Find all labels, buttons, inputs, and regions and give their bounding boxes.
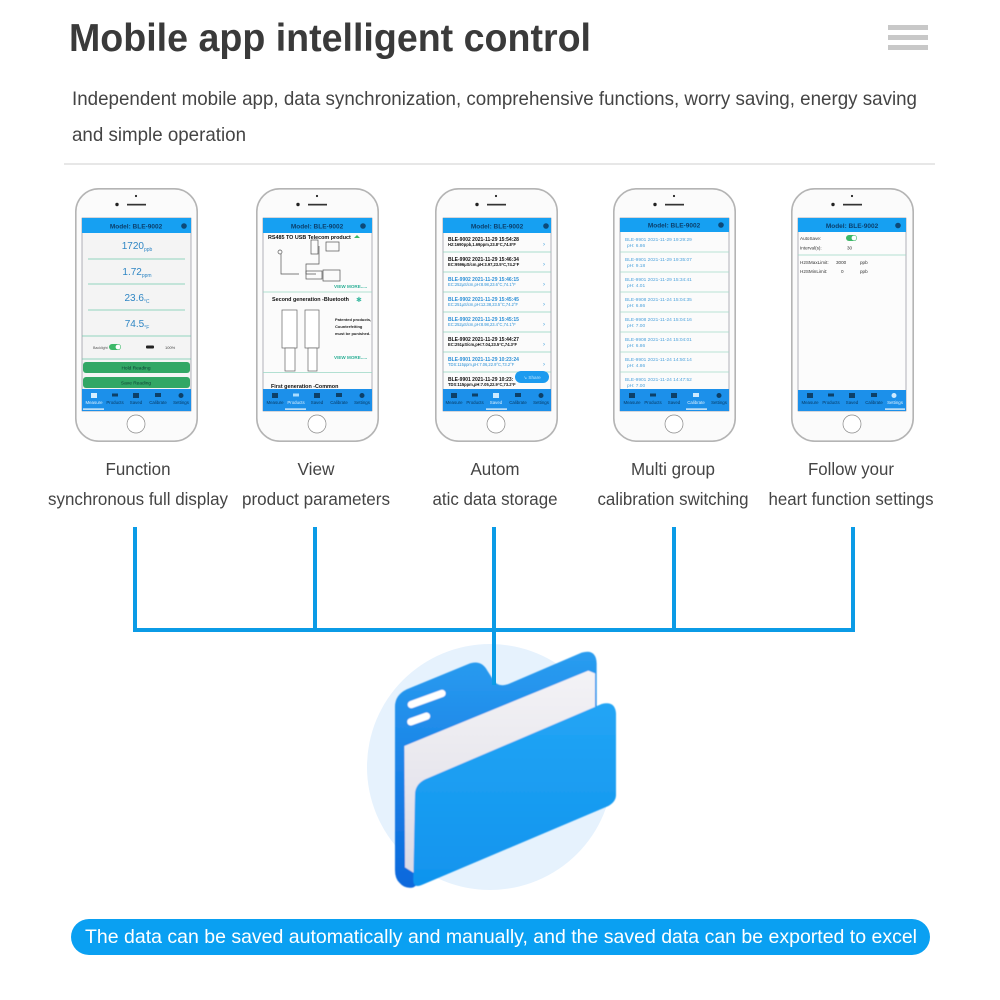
phone: calibration screen: BLE-9901 2021-11-24 14:50:14: [625, 357, 692, 363]
folder back panel: [395, 652, 597, 888]
phone: product parameters screen: VIEW MORE.....: [334, 355, 367, 360]
phone: saved data screen: Saved: [490, 400, 503, 405]
phone: calibration screen: Products: [644, 400, 662, 405]
phone: saved data screen: Measure: [445, 400, 463, 405]
caption: function display: [48, 459, 228, 509]
phone: settings screen: ppb: [860, 269, 868, 274]
phone: live measurement screen: Settings: [173, 400, 190, 405]
caption: calibration switching: [598, 459, 748, 509]
phone: settings screen: Measure: [801, 400, 819, 405]
phone: calibration screen: pH: 9.18: [627, 263, 645, 269]
phone: product parameters screen: Calibrate: [330, 400, 348, 405]
phone: saved data screen: BLE-9902 2021-11-29 15:45:45: [448, 297, 519, 303]
caption: data storage: Autom: [470, 459, 520, 479]
phone: calibration screen: Saved: [668, 400, 681, 405]
caption: calibration switching: Multi group: [631, 459, 715, 479]
phone: calibration screen: Measure: [623, 400, 641, 405]
caption: settings: [768, 459, 934, 509]
phone: calibration screen: BLE-9901 2021-11-24 14:47:52: [625, 377, 692, 383]
phone: calibration screen: Calibrate: [687, 400, 705, 405]
phone: live measurement screen: 74.5: [125, 319, 144, 330]
connector lines: [133, 527, 855, 685]
phone: saved data screen: Model: BLE-9002: [471, 224, 524, 230]
phone: live measurement screen: Hold Reading: [121, 366, 151, 372]
phone: settings screen: 30: [847, 246, 853, 250]
phone: calibration screen: Settings: [711, 400, 728, 405]
phone: live measurement screen: [76, 189, 197, 441]
phone: product parameters screen: [257, 189, 378, 441]
phone: live measurement screen: ppm: [142, 273, 152, 279]
phone: settings screen: ppb: [860, 260, 868, 265]
phone: calibration screen: [614, 189, 735, 441]
caption: settings: Follow your: [808, 459, 894, 479]
phone: product parameters screen: Settings: [354, 400, 371, 405]
phone: saved data screen: ›: [543, 262, 545, 268]
phone: settings screen: Model: BLE-9002: [826, 223, 879, 230]
intro text: and simple operation: [72, 124, 246, 146]
caption: function display: synchronous full display: [48, 489, 228, 509]
phone: product parameters screen: ✱: [356, 296, 362, 304]
phone: saved data screen: EC:9596μS/cm,pH:3.97,23.5°C,74.2°F: [448, 262, 520, 267]
phone: calibration screen: pH: 4.86: [627, 363, 645, 369]
phone: product parameters screen: Second generation -Bluetooth: [272, 297, 349, 303]
callout: export note: The data can be saved automatically and manually, and the saved data can be exported to excel: [85, 926, 917, 948]
phone: saved data screen: ›: [543, 282, 545, 288]
phone: product parameters screen: RS485 TO USB Telecom product: [268, 235, 351, 241]
phone: saved data screen: EC:252μS/cm,pH:8.98,23.6°C,74.1°F: [448, 282, 516, 287]
phone: settings screen: Calibrate: [865, 400, 883, 405]
phone: product parameters screen: Products: [287, 400, 305, 405]
phone: calibration screen: BLE-9901 2021-11-29 19:35:07: [625, 257, 692, 263]
caption: product parameters: View: [298, 459, 335, 479]
phone: calibration screen: pH: 6.86: [627, 343, 645, 349]
phone: settings screen: H2SMinLimit:: [800, 269, 827, 274]
phone: saved data screen: ›: [543, 242, 545, 248]
phone: product parameters screen: Saved: [311, 400, 324, 405]
background circle: [367, 644, 613, 890]
phone: saved data screen: ›: [543, 342, 545, 348]
phone: saved data screen: Calibrate: [509, 400, 527, 405]
phone: live measurement screen: °C: [144, 299, 150, 305]
intro text: Independent mobile app, data synchronization, comprehensive functions, worry saving, energy saving: [72, 88, 917, 110]
phone: calibration screen: Model: BLE-9002: [648, 222, 701, 230]
phone: live measurement screen: Calibrate: [149, 400, 167, 405]
phone: calibration screen: pH: 6.86: [627, 243, 645, 249]
phone: saved data screen: H2:1690ppb,1.69ppm,23.8°C,74.8°F: [448, 242, 516, 247]
folder front panel: [413, 703, 616, 886]
caption: function display: Function: [106, 459, 170, 479]
phone: saved data screen: BLE-9901 2021-11-29 10:23:24: [448, 357, 519, 363]
phone: calibration screen: BLE-9908 2021-11-24 15:04:01: [625, 337, 692, 343]
phone: product parameters screen: First generation -Common: [271, 384, 338, 390]
phone: settings screen: 3000: [836, 260, 847, 265]
phone: live measurement screen: ppb: [144, 247, 153, 253]
caption: calibration switching: calibration switching: [598, 489, 748, 509]
phone: live measurement screen: 1720: [122, 241, 144, 252]
phone: live measurement screen: Save Reading: [121, 380, 151, 386]
paper stack: [404, 671, 595, 873]
phone: calibration screen: BLE-9908 2021-11-24 15:04:35: [625, 297, 692, 303]
icon: folder: [395, 652, 616, 888]
phone: saved data screen: TDS:115ppm,pH:7.06,22.9°C,73.2°F: [448, 362, 515, 367]
phone: saved data screen: [436, 189, 557, 441]
caption: data storage: atic data storage: [432, 489, 558, 509]
phone: live measurement screen: Products: [106, 400, 124, 405]
phone: calibration screen: BLE-9908 2021-11-24 15:04:16: [625, 317, 692, 323]
phone: product parameters screen: Measure: [266, 400, 284, 405]
phone: saved data screen: EC:251μS/cm,pH:12.38,23.5°C,74.2°F: [448, 302, 519, 307]
phone: calibration screen: BLE-9901 2021-11-29 15:34:41: [625, 277, 692, 283]
phone: product parameters screen: Counterfeiting: [335, 324, 363, 329]
phone: calibration screen: BLE-9901 2021-11-29 19:29:29: [625, 237, 692, 243]
phone: saved data screen: EC:251μS/cm,pH:7.04,23.5°C,74.3°F: [448, 342, 518, 347]
phone: saved data screen: Products: [466, 400, 484, 405]
phone: settings screen: Interval(s):: [800, 246, 822, 250]
phone: product parameters screen: VIEW MORE.....: [334, 284, 367, 289]
phone: saved data screen: BLE-9002 2021-11-29 15:54:28: [448, 237, 519, 243]
phone: live measurement screen: 23.6: [124, 293, 144, 304]
phone: saved data screen: ›: [543, 302, 545, 308]
phone: settings screen: Products: [822, 400, 840, 405]
phone: live measurement screen: Model: BLE-9002: [110, 224, 163, 230]
phone: calibration screen: pH: 7.00: [627, 383, 645, 389]
phone: product parameters screen: Patented products,: [335, 317, 371, 322]
phone: settings screen: Settings: [887, 400, 904, 405]
phone: settings screen: 0: [841, 269, 844, 274]
phone: settings screen: [792, 189, 913, 441]
phone: live measurement screen: Saved: [130, 400, 143, 405]
caption: product parameters: product parameters: [242, 489, 390, 509]
phone: product parameters screen: must be punished.: [335, 331, 370, 336]
phone: live measurement screen: °F: [144, 325, 149, 331]
phone: settings screen: Saved: [846, 400, 859, 405]
phone: live measurement screen: Backlight: [93, 346, 108, 350]
caption: product parameters: [242, 459, 390, 509]
caption: settings: heart function settings: [768, 489, 934, 509]
phone: saved data screen: ↘ Share: [523, 375, 541, 380]
phone: settings screen: AutoSave:: [800, 236, 821, 241]
folder label marks: [406, 689, 447, 727]
phone: saved data screen: TDS:115ppm,pH:7.05,22.9°C,73.2°F: [448, 382, 516, 387]
phone: saved data screen: EC:252μS/cm,pH:8.98,23.4°C,74.1°F: [448, 322, 516, 327]
callout: export note: [71, 919, 930, 955]
phone: calibration screen: pH: 4.01: [627, 283, 645, 289]
phone: settings screen: H2SMaxLimit:: [800, 260, 829, 265]
phone: saved data screen: BLE-9902 2021-11-29 15:46:34: [448, 257, 519, 263]
phone: saved data screen: BLE-9902 2021-11-29 15:44:27: [448, 337, 519, 343]
phone: saved data screen: BLE-9902 2021-11-29 15:45:15: [448, 317, 519, 323]
phone: saved data screen: BLE-9902 2021-11-29 15:46:15: [448, 277, 519, 283]
phone: saved data screen: ›: [543, 362, 545, 368]
phone: live measurement screen: 100%: [165, 345, 176, 350]
phone: saved data screen: Settings: [533, 400, 550, 405]
phone: live measurement screen: 1.72: [122, 267, 142, 278]
intro text: [72, 88, 917, 146]
phone: calibration screen: pH: 7.00: [627, 323, 645, 329]
phone: product parameters screen: Model: BLE-9002: [291, 224, 344, 230]
phone: saved data screen: BLE-9901 2021-11-29 10:23:: [448, 377, 514, 383]
phone: live measurement screen: Measure: [85, 400, 103, 405]
title: Mobile app intelligent control: [69, 17, 591, 60]
phone: saved data screen: ›: [543, 322, 545, 328]
caption: data storage: [432, 459, 558, 509]
phone: calibration screen: pH: 6.86: [627, 303, 645, 309]
icon: menu: [888, 25, 928, 50]
